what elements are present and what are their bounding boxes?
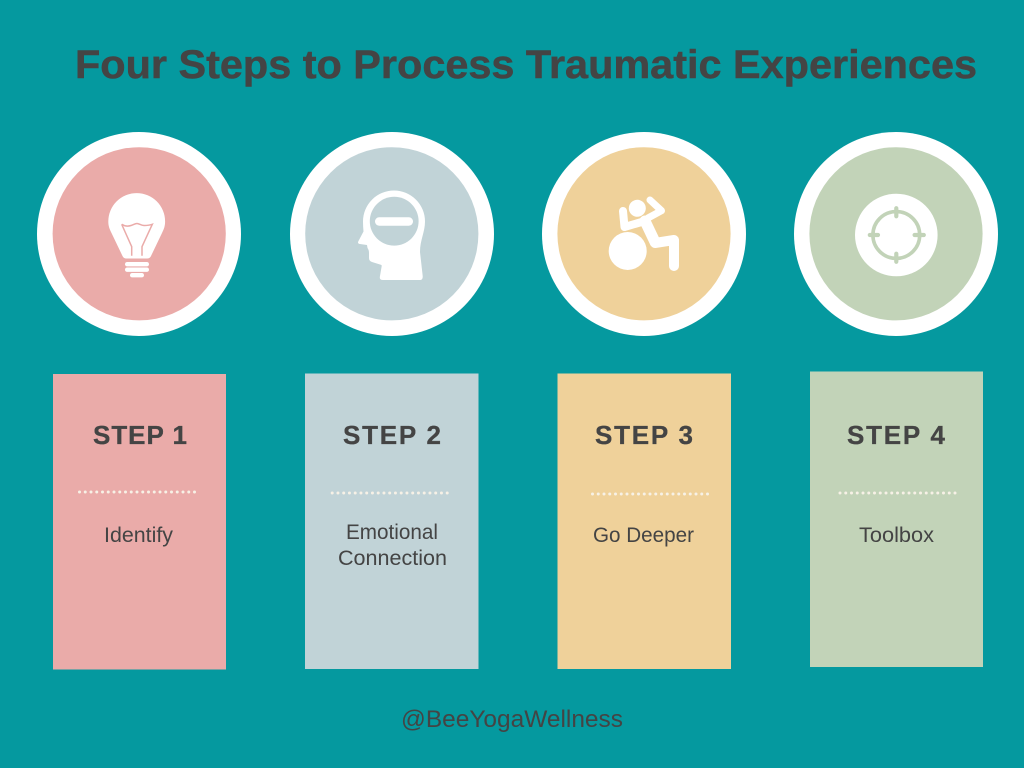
- icon: target: [855, 194, 938, 276]
- step 4 heading: STEP 4: [847, 420, 946, 450]
- step 2 label: Emotional: [346, 521, 438, 544]
- step 2 heading: STEP 2: [343, 420, 441, 450]
- step 4 label: Toolbox: [859, 524, 935, 547]
- step 4 circle with target icon: [794, 132, 998, 336]
- step 3 label: Go Deeper: [593, 524, 694, 547]
- step 1 circle with lightbulb icon: [37, 132, 241, 336]
- icon: person on exercise ball: [609, 200, 674, 270]
- step 3 heading: STEP 3: [595, 420, 693, 450]
- panel: step 1: [53, 374, 226, 670]
- footer handle: @BeeYogaWellness: [401, 706, 623, 733]
- icon: head with minus sign: [358, 190, 425, 280]
- step 2 label: Connection: [338, 547, 447, 570]
- step 2 circle with head icon: [290, 132, 494, 336]
- title: Four Steps to Process Traumatic Experiences: [75, 43, 977, 87]
- panel: step 4: [810, 372, 983, 667]
- panel: step 2: [305, 374, 478, 669]
- step 1 heading: STEP 1: [93, 420, 187, 450]
- icon: lightbulb: [108, 193, 165, 277]
- step 3 circle with fitness ball icon: [542, 132, 746, 336]
- step 1 label: Identify: [104, 524, 173, 547]
- panel: step 3: [558, 374, 731, 669]
